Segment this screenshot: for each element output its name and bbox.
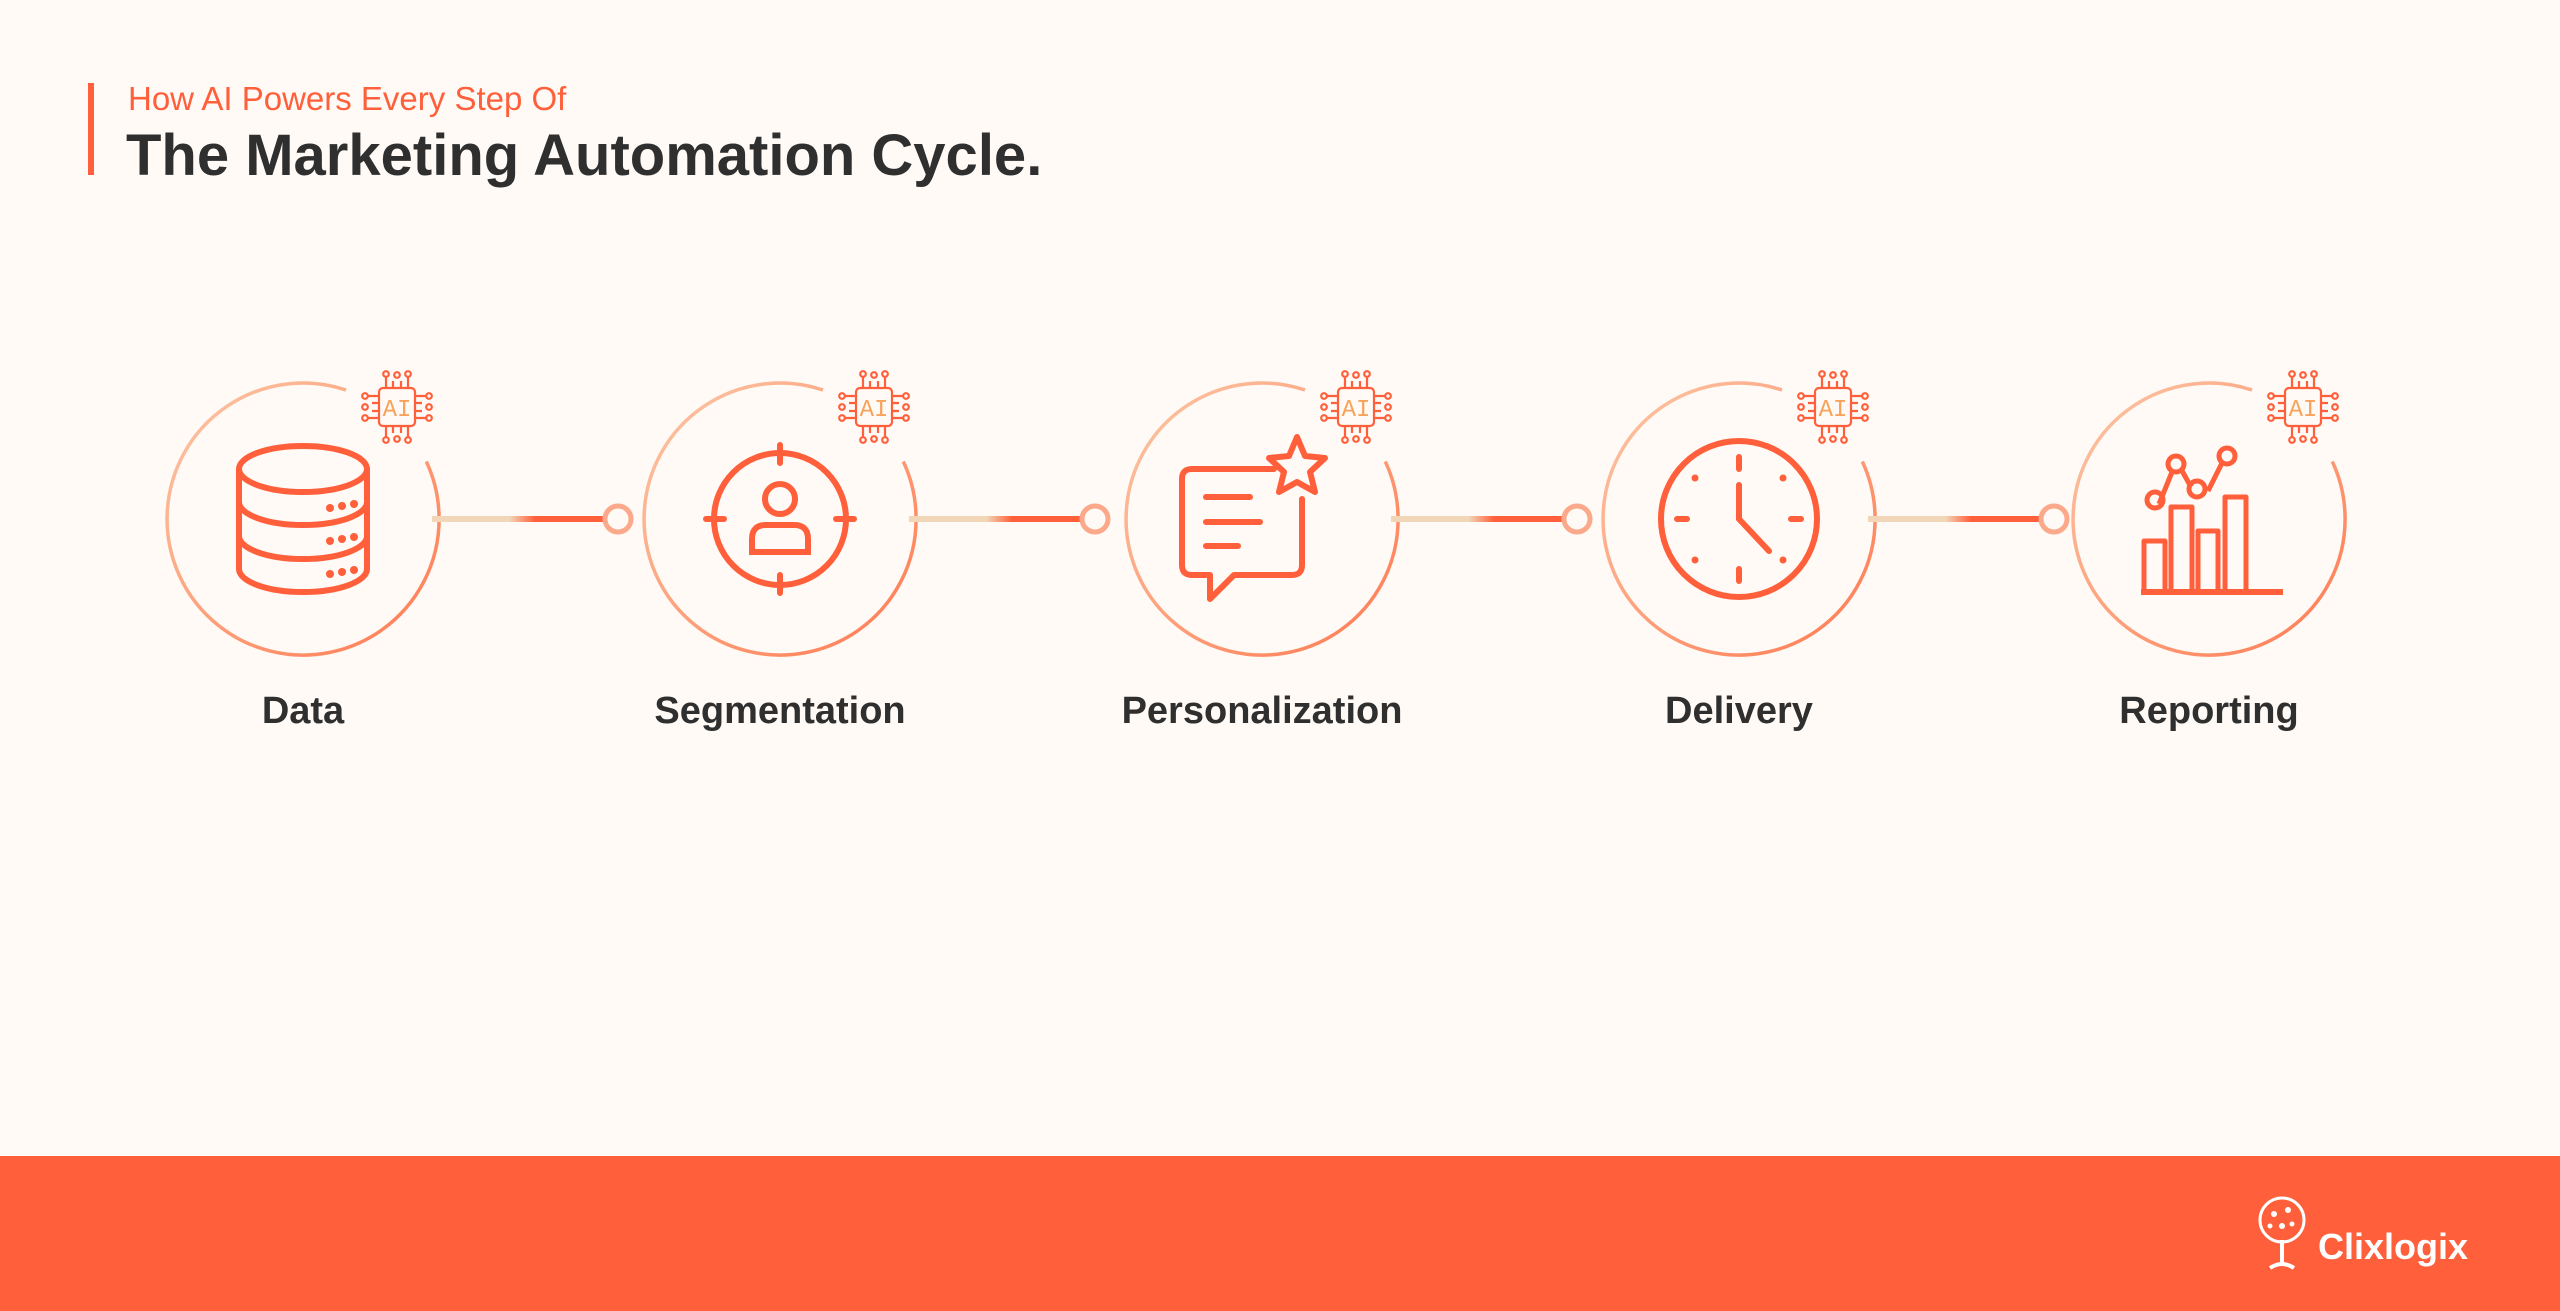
main title: The Marketing Automation Cycle. <box>126 123 1042 188</box>
step: Delivery <box>1603 371 2067 655</box>
title block <box>88 80 1042 188</box>
label: Personalization: Personalization <box>1122 690 1402 732</box>
step: Reporting <box>2073 371 2345 655</box>
icon: database <box>239 446 367 592</box>
label: Reporting: Reporting <box>2119 690 2299 732</box>
label: Delivery: Delivery <box>1665 690 1813 732</box>
footer band <box>0 1156 2560 1311</box>
label: Segmentation: Segmentation <box>654 690 906 732</box>
icon: target person <box>706 445 854 593</box>
icon: chat bubble with star <box>1182 437 1325 599</box>
step: Segmentation <box>644 371 1108 655</box>
label: Data: Data <box>262 690 344 732</box>
icon: bar chart <box>2141 448 2283 592</box>
accent bar <box>88 83 94 175</box>
icon: clock <box>1661 441 1817 597</box>
brand name: Clixlogix <box>2318 1226 2468 1267</box>
step: Personalization <box>1126 371 1590 655</box>
step: Data <box>167 371 631 655</box>
icon: tree brain <box>2258 1196 2306 1270</box>
logo <box>2258 1196 2468 1270</box>
subtitle: How AI Powers Every Step Of <box>128 80 566 117</box>
